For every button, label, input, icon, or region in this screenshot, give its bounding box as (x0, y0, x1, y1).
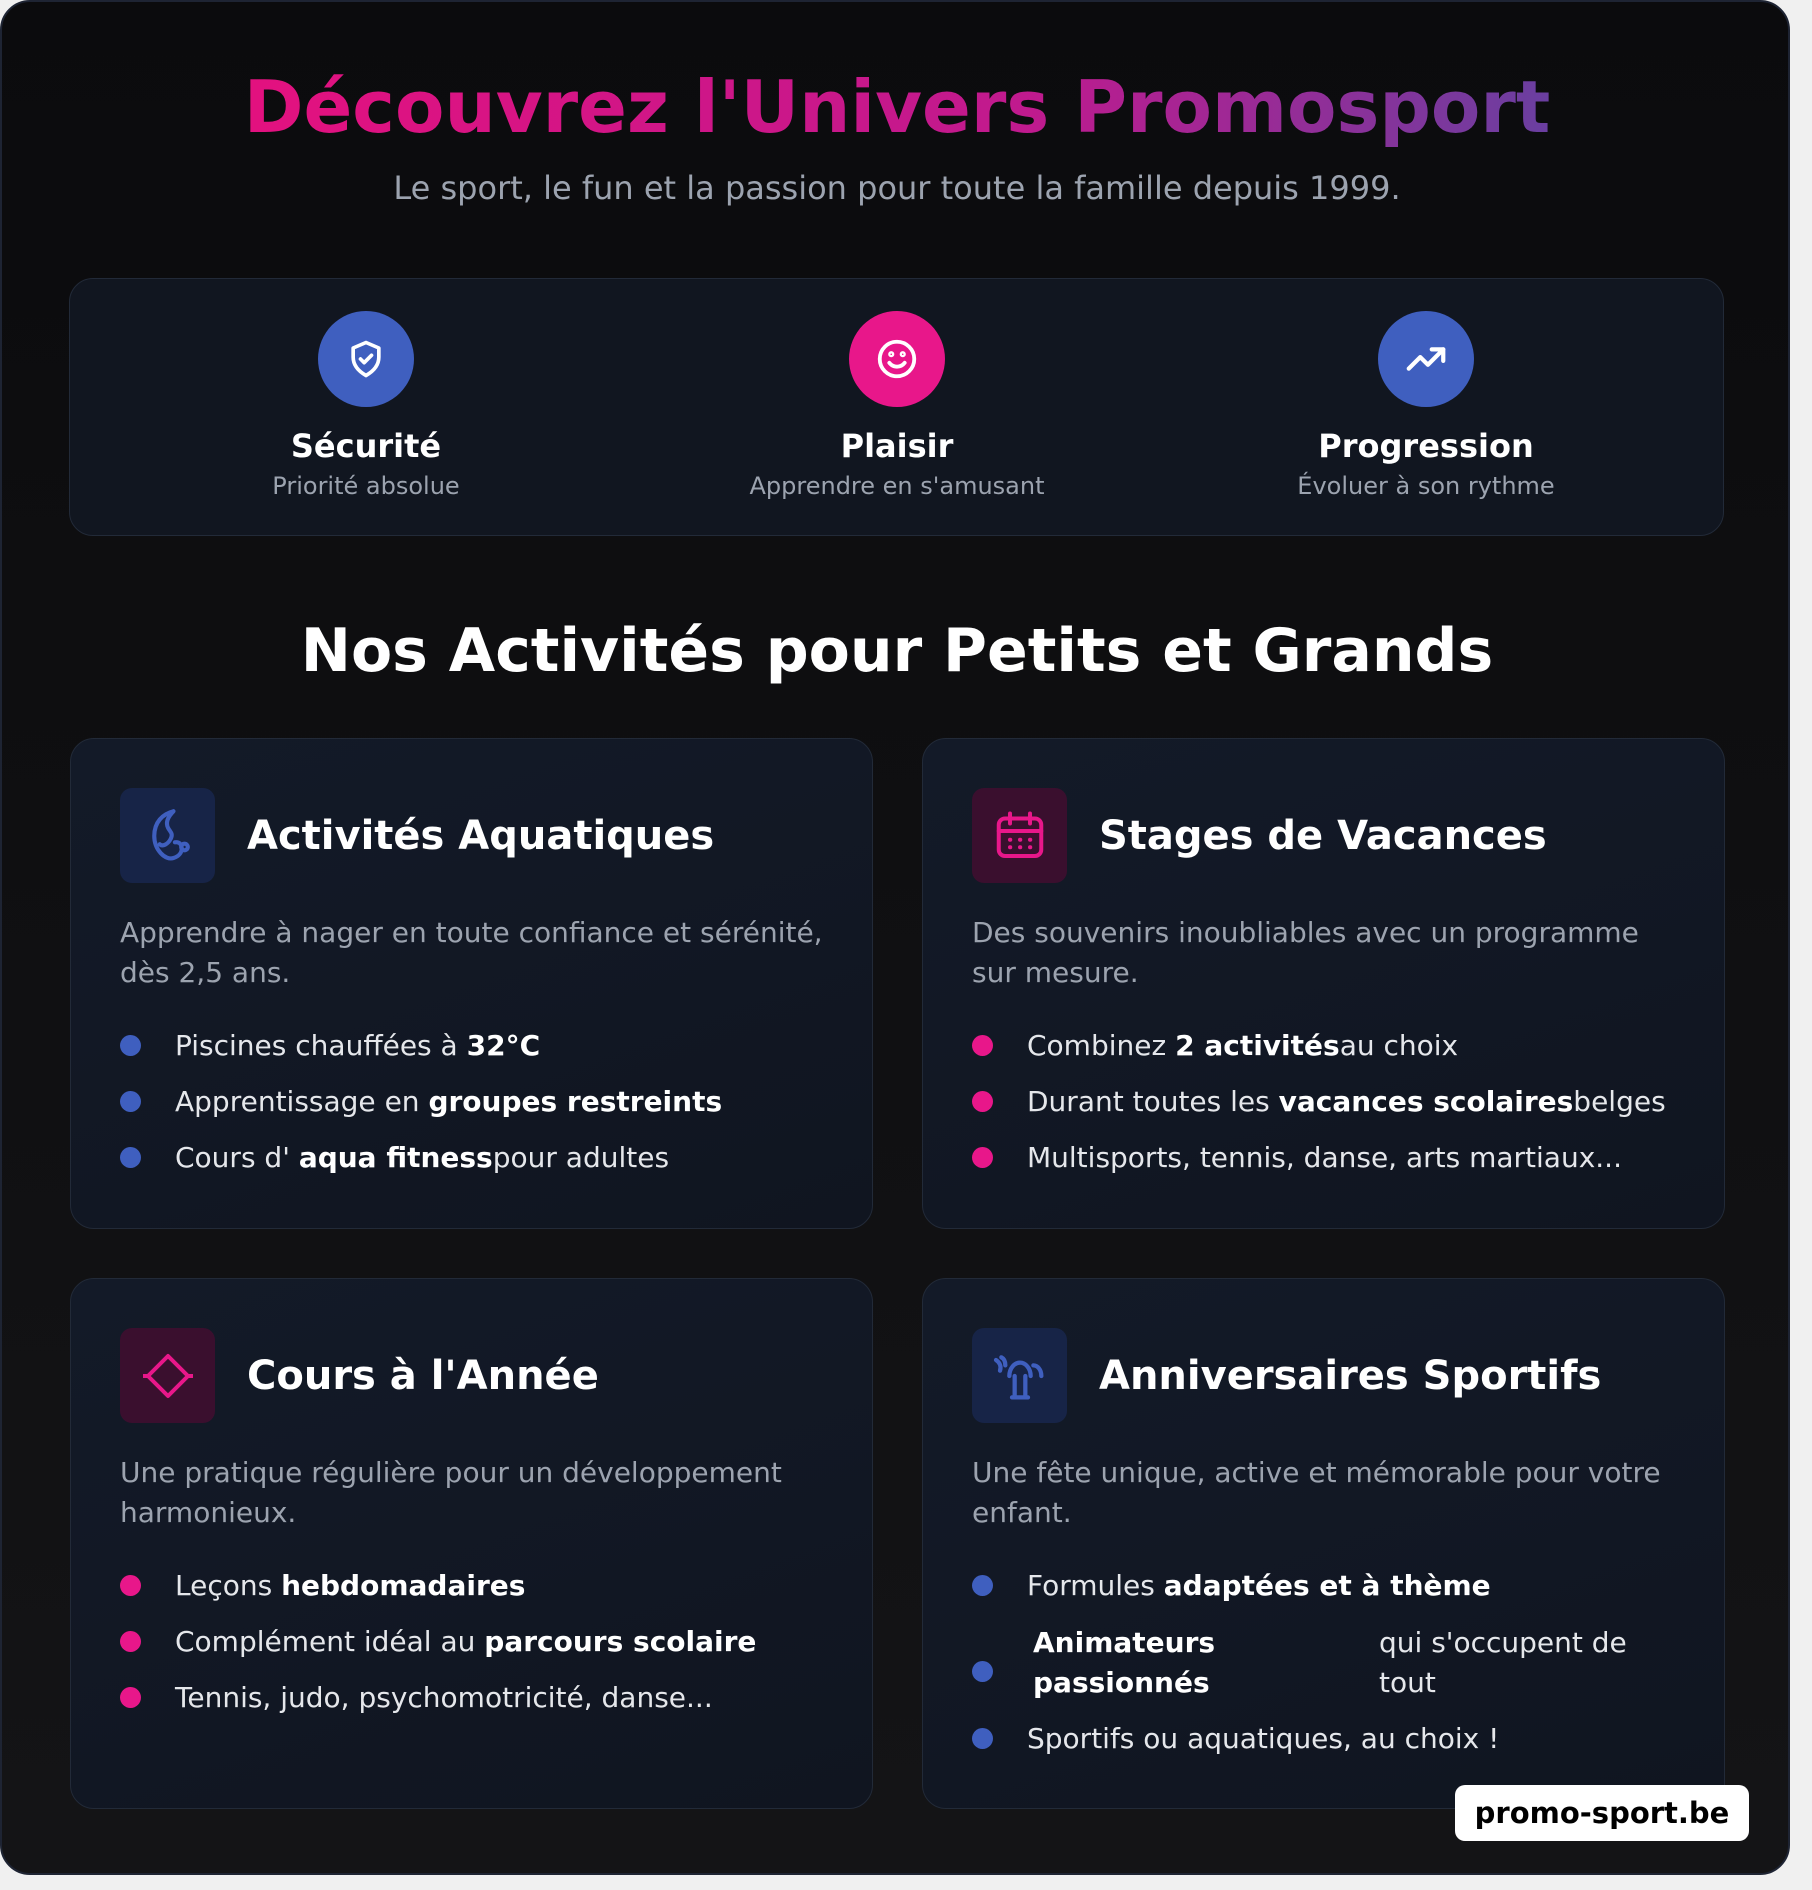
card: stages: Durant toutes les vacances scolairesbelges (1027, 1085, 1666, 1118)
card: aquatiques: Activités Aquatiques (247, 813, 714, 859)
card: stages (922, 738, 1725, 1229)
bullet: animateurs: Animateurs (1033, 1626, 1215, 1659)
value: plaisir: Apprendre en s'amusant (749, 472, 1044, 500)
card: stages: Stages de Vacances (1099, 813, 1547, 859)
card: anniversaires: Anniversaires Sportifs (1099, 1353, 1601, 1399)
card: anniversaires (922, 1278, 1725, 1809)
card: aquatiques: Apprentissage en groupes restreints (175, 1085, 722, 1118)
bullet: animateurs: qui s'occupent de (1379, 1626, 1627, 1659)
value: progression: Progression (1318, 427, 1534, 465)
bullet: animateurs (972, 1626, 1627, 1699)
card: aquatiques (70, 738, 873, 1229)
card: anniversaires: Une fête unique, active et mémorable pour votre enfant. (972, 1456, 1661, 1529)
icon: calendar (972, 788, 1067, 883)
panel: values (69, 278, 1724, 536)
value: progression (1297, 311, 1555, 500)
card: cours: Cours à l'Année (247, 1353, 599, 1399)
bullet: animateurs: passionnés (1033, 1666, 1210, 1699)
value: securite: Priorité absolue (272, 472, 460, 500)
card: aquatiques: Apprendre à nager en toute confiance et sérénité, dès 2,5 ans. (120, 916, 823, 989)
card: stages: Des souvenirs inoubliables avec un programme sur mesure. (972, 916, 1639, 989)
card: cours: Tennis, judo, psychomotricité, danse... (175, 1681, 713, 1714)
subtitle: Le sport, le fun et la passion pour toute la famille depuis 1999. (393, 169, 1401, 207)
value: securite (272, 311, 460, 500)
card: anniversaires: Formules adaptées et à thème (1027, 1569, 1491, 1602)
value: securite: Sécurité (291, 427, 441, 465)
icon: party (972, 1328, 1067, 1423)
icon: diamond (120, 1328, 215, 1423)
section heading: Nos Activités pour Petits et Grands (301, 616, 1493, 686)
value: progression: Évoluer à son rythme (1297, 472, 1555, 500)
bullet: animateurs: tout (1379, 1666, 1436, 1699)
card: aquatiques: Cours d' aqua fitnesspour adultes (175, 1141, 669, 1174)
card: cours: Complément idéal au parcours scolaire (175, 1625, 756, 1658)
card: stages: Multisports, tennis, danse, arts martiaux... (1027, 1141, 1622, 1174)
icon: water (120, 788, 215, 883)
title: Découvrez l'Univers Promosport (244, 65, 1550, 149)
badge: website (1455, 1785, 1749, 1841)
value: plaisir (749, 311, 1044, 500)
card: anniversaires: Sportifs ou aquatiques, au choix ! (1027, 1722, 1499, 1755)
card: cours: Leçons hebdomadaires (175, 1569, 525, 1602)
value: plaisir: Plaisir (841, 427, 953, 465)
badge: website: promo-sport.be (1475, 1796, 1729, 1830)
card: cours (70, 1278, 873, 1809)
card: aquatiques: Piscines chauffées à 32°C (175, 1029, 540, 1062)
card: stages: Combinez 2 activitésau choix (1027, 1029, 1458, 1062)
card: cours: Une pratique régulière pour un développement harmonieux. (120, 1456, 782, 1529)
